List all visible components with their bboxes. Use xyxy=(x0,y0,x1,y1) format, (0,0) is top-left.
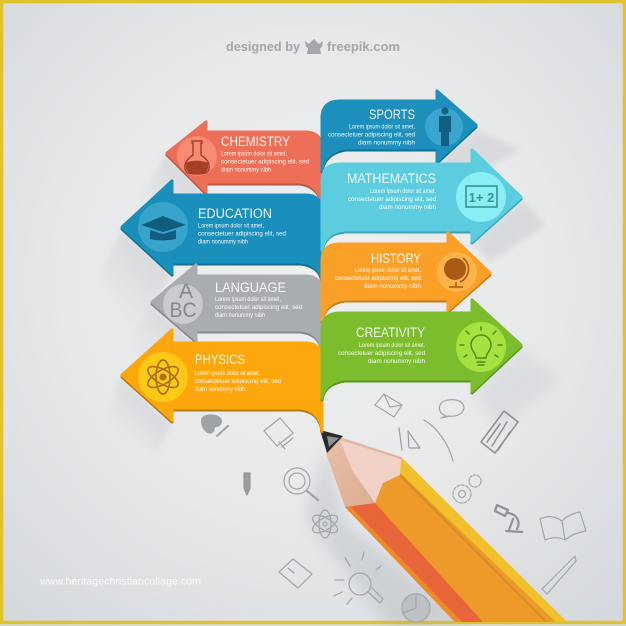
icon: gears xyxy=(453,475,481,503)
brand line: designed by freepik.com: designed by xyxy=(226,40,300,54)
text: creativity body: diam nonummy nibh xyxy=(368,358,425,365)
heading: education: EDUCATION xyxy=(198,206,272,221)
icon: curved arrow xyxy=(424,420,453,461)
text: mathematics body xyxy=(348,188,436,211)
text: sports body: consectetuer adipiscing elit, sed xyxy=(328,132,415,138)
heading: language: LANGUAGE xyxy=(215,280,286,295)
doodle icons xyxy=(202,394,586,622)
text: education body: consectetuer adipiscing elit, sed xyxy=(198,230,286,238)
heading: chemistry: CHEMISTRY xyxy=(221,134,290,149)
text: physics body: consectetuer adipiscing elit, sed xyxy=(195,378,281,385)
text: chemistry body: Lorem ipsum dolor sit amet, xyxy=(221,150,287,158)
pencil yellow edge xyxy=(399,457,567,622)
icon: ruler xyxy=(542,556,576,594)
arrow: physics xyxy=(122,330,322,432)
text: education body xyxy=(198,222,286,246)
icon: microscope xyxy=(495,505,522,532)
icon: person xyxy=(425,107,463,146)
icon: blackboard 1+2: 1+ 2 xyxy=(469,190,494,205)
icon: pie chart xyxy=(402,594,430,622)
icon: palette xyxy=(202,415,228,436)
heading: physics: PHYSICS xyxy=(195,352,245,367)
arrow: history xyxy=(322,233,490,322)
heading: mathematics: MATHEMATICS xyxy=(347,171,436,186)
pencil wood tip xyxy=(326,437,401,507)
icon: atom xyxy=(310,510,340,538)
pencil lead xyxy=(320,430,343,453)
icon: flask xyxy=(177,136,217,176)
text: mathematics body: consectetuer adipiscing elit, sed xyxy=(348,196,436,203)
pencil body xyxy=(345,457,567,622)
arrow: sports xyxy=(322,91,476,172)
text: history body: Lorem ipsum dolor sit amet, xyxy=(355,267,421,274)
text: sports body: Lorem ipsum dolor sit amet, xyxy=(349,124,415,130)
heading: sports: SPORTS xyxy=(369,107,415,122)
text: sports body xyxy=(328,124,415,146)
text: creativity body: Lorem ipsum dolor sit amet, xyxy=(359,342,425,349)
pencil shadow xyxy=(305,445,470,626)
icon: bar chart xyxy=(481,411,518,453)
text: physics body: diam nonummy nibh xyxy=(195,386,245,393)
pencil red stripe xyxy=(345,503,483,622)
text: language body xyxy=(215,296,302,319)
text: creativity body xyxy=(338,342,425,365)
icon: ABC xyxy=(163,280,203,324)
text: language body: consectetuer adipiscing elit, sed xyxy=(215,304,302,311)
text: chemistry body xyxy=(221,150,309,174)
brand line: designed by freepik.com: freepik.com xyxy=(327,40,400,54)
text: physics body xyxy=(195,370,281,393)
arrow: education xyxy=(122,181,322,282)
icon: note card xyxy=(279,559,312,588)
brand line: designed by freepik.com xyxy=(226,39,400,54)
icon: blackboard 1+2 xyxy=(456,172,506,222)
arrow: creativity xyxy=(322,300,521,400)
icon: light bulb xyxy=(334,552,383,604)
icon: graduation cap xyxy=(138,202,188,252)
icon: small pencil xyxy=(244,473,250,495)
icon: set square xyxy=(399,428,420,450)
icon: magnifier xyxy=(284,468,318,500)
text: physics body: Lorem ipsum dolor sit amet, xyxy=(195,370,260,377)
icon: atom xyxy=(138,352,188,402)
text: mathematics body: Lorem ipsum dolor sit amet, xyxy=(370,188,436,195)
text: history body: consectetuer adipiscing elit, sed xyxy=(335,275,421,282)
text: history body: diam nonummy nibh xyxy=(364,283,421,290)
icon: light bulb xyxy=(456,322,506,372)
arrow: language xyxy=(152,265,322,352)
arrow: chemistry xyxy=(167,122,322,207)
pencil xyxy=(305,430,567,626)
text: education body: diam nonummy nibh xyxy=(198,238,248,246)
icon: ABC: BC xyxy=(170,299,196,322)
text: history body xyxy=(335,267,421,290)
text: chemistry body: consectetuer adipiscing elit, sed xyxy=(221,158,309,166)
text: mathematics body: diam nonummy nibh xyxy=(379,204,436,211)
text: language body: Lorem ipsum dolor sit amet, xyxy=(215,296,281,303)
icon: speech bubble xyxy=(439,400,464,418)
text: language body: diam nonummy nibh xyxy=(215,312,265,319)
icon: monitor xyxy=(264,418,293,449)
text: sports body: diam nonummy nibh xyxy=(358,140,415,146)
icon: open book xyxy=(540,512,586,540)
cast shadows xyxy=(95,130,560,453)
icon: globe xyxy=(437,252,477,292)
text: education body: Lorem ipsum dolor sit amet, xyxy=(198,222,264,230)
text: chemistry body: diam nonummy nibh xyxy=(221,166,271,174)
heading: creativity: CREATIVITY xyxy=(356,325,425,340)
icon: ABC: A xyxy=(179,280,193,303)
watermark url: www.heritagechristiancollage.com xyxy=(39,576,201,588)
icon: envelope xyxy=(375,394,402,417)
heading: history: HISTORY xyxy=(371,251,421,266)
text: creativity body: consectetuer adipiscing elit, sed xyxy=(338,350,425,357)
arrow: mathematics xyxy=(322,150,521,252)
